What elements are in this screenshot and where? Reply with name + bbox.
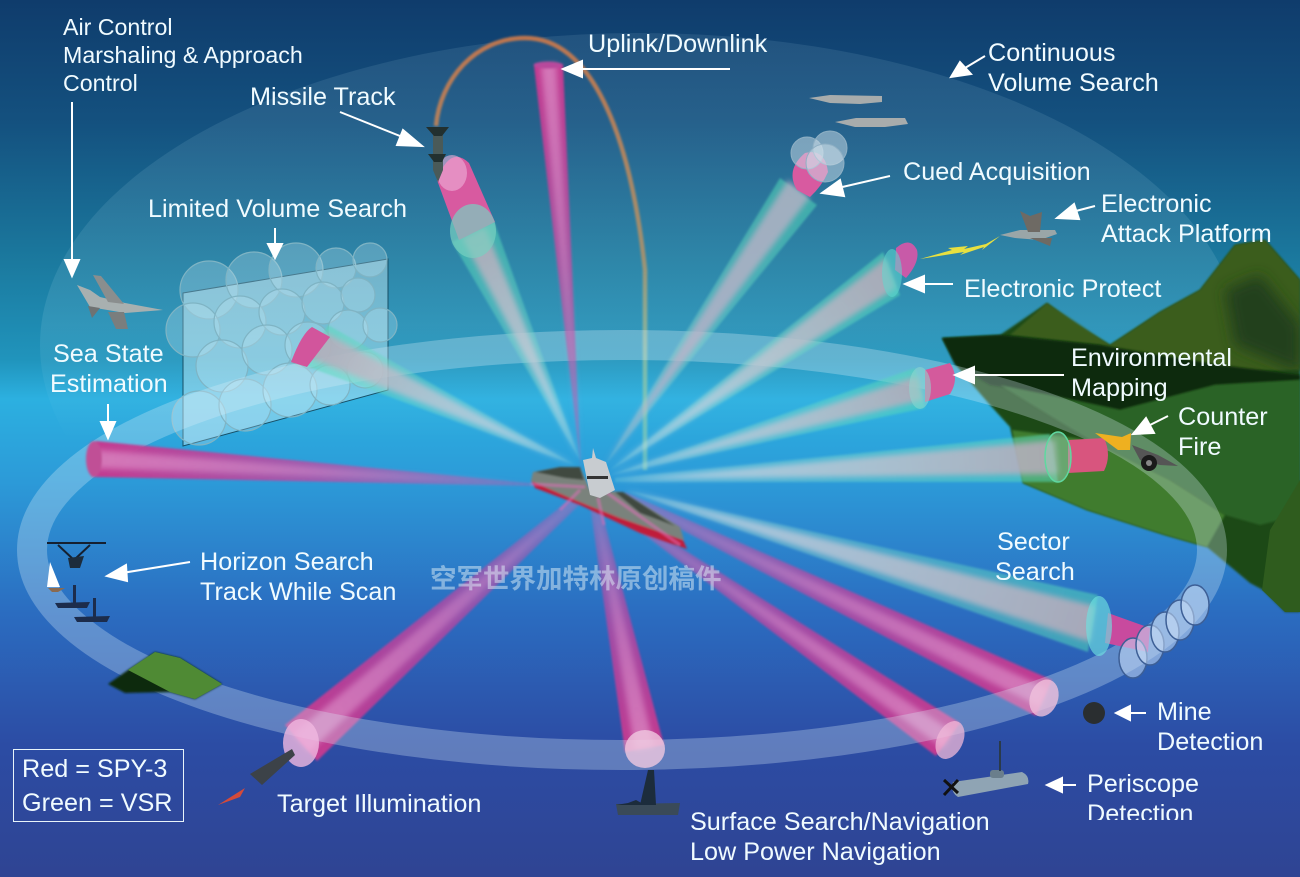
label: electronic attack platform	[1101, 190, 1272, 248]
beam: target illumination	[285, 497, 581, 761]
electronic attack jet	[1000, 211, 1057, 246]
arrow: mine	[1116, 706, 1146, 720]
coverage dome	[40, 33, 1240, 657]
beam: south surface	[590, 505, 664, 752]
label: sea state estimation: Estimation	[50, 370, 168, 398]
label: continuous volume search: Continuous	[988, 39, 1115, 67]
label: electronic attack platform: Electronic	[1101, 190, 1212, 218]
beam: missile track	[437, 155, 580, 460]
beam: environmental mapping	[610, 363, 955, 475]
label: air control: Control	[63, 70, 138, 96]
mine	[1083, 702, 1105, 724]
label: periscope detection	[1089, 774, 1198, 820]
arrow: missile track	[340, 112, 422, 146]
beam: counter fire	[615, 432, 1108, 482]
label: mine detection	[1157, 698, 1263, 756]
beam: east surface	[625, 492, 1052, 716]
label: surface search: Surface Search/Navigation	[690, 808, 990, 836]
label: uplink/downlink: Uplink/Downlink	[588, 30, 768, 58]
label: sector search: Sector	[997, 528, 1070, 556]
label: sea state estimation	[50, 340, 168, 398]
label: air control: Air Control	[63, 14, 173, 40]
arrow: cued	[822, 176, 890, 196]
arrow: air control	[65, 102, 79, 276]
arrow: protect	[905, 276, 953, 292]
label: horizon search	[200, 548, 396, 606]
label: air control	[63, 14, 303, 96]
ship hull	[530, 467, 687, 549]
label: periscope detection: Periscope	[1087, 770, 1199, 798]
arrow: uplink	[563, 61, 730, 77]
label: counter fire: Fire	[1178, 433, 1221, 461]
label: sector search	[995, 528, 1075, 586]
beam: south-east surface	[600, 497, 960, 756]
beam end: target illumination	[283, 719, 319, 767]
jamming bolt	[920, 236, 1000, 259]
fighter jet	[77, 275, 163, 329]
legend box: Green = VSR	[22, 789, 172, 817]
label: continuous volume search	[988, 39, 1159, 97]
beam end: south-east surface	[930, 716, 970, 764]
sector search spots	[1119, 585, 1209, 678]
label: missile track: Missile Track	[250, 83, 396, 111]
label: periscope detection: Detection	[1087, 800, 1193, 828]
label: counter fire	[1178, 403, 1268, 461]
arrow: periscope	[1047, 778, 1076, 792]
arrow: electronic attack	[1057, 204, 1095, 219]
small island	[108, 652, 222, 699]
label: environmental mapping: Environmental	[1071, 344, 1232, 372]
cued acquisition spots	[791, 131, 847, 197]
label: environmental mapping	[1071, 344, 1232, 402]
surveillance ring	[32, 345, 1212, 755]
beam: cued acquisition	[605, 178, 817, 465]
beam end: south surface	[625, 730, 665, 768]
uplink arc	[436, 38, 645, 470]
arrow: counter fire	[1133, 416, 1168, 434]
limited volume search panel	[166, 243, 397, 446]
aircraft pair	[809, 95, 908, 127]
arrow: sea state	[101, 404, 115, 438]
label: air control: Marshaling & Approach	[63, 42, 303, 68]
ship superstructure	[583, 448, 615, 498]
label: horizon search: Horizon Search	[200, 548, 374, 576]
submarine	[944, 741, 1028, 797]
label: electronic protect: Electronic Protect	[964, 275, 1161, 303]
counter fire flash	[1095, 433, 1131, 450]
label: mine detection: Detection	[1157, 728, 1263, 756]
target missile	[218, 749, 295, 805]
label: limited volume search: Limited Volume Search	[148, 195, 407, 223]
legend box	[14, 750, 184, 822]
label: cued acquisition: Cued Acquisition	[903, 158, 1091, 186]
legend box: Red = SPY-3	[22, 755, 167, 783]
missile at uplink	[426, 127, 449, 182]
label: counter fire: Counter	[1178, 403, 1268, 431]
label: target illumination: Target Illumination	[277, 790, 481, 818]
island mountains	[942, 240, 1300, 612]
arrow: horizon	[107, 562, 190, 581]
label: sector search: Search	[995, 558, 1075, 586]
arrow: limited	[268, 228, 282, 258]
beam: electronic protect	[610, 242, 918, 470]
small surface ship	[616, 770, 680, 815]
label: sea state estimation: Sea State	[53, 340, 164, 368]
label: environmental mapping: Mapping	[1071, 374, 1168, 402]
label: mine detection: Mine	[1157, 698, 1212, 726]
label: surface search	[690, 808, 990, 866]
arrow: environmental	[955, 367, 1064, 383]
arrow: continuous	[951, 56, 985, 77]
label: surface search: Low Power Navigation	[690, 838, 941, 866]
label: horizon search: Track While Scan	[200, 578, 396, 606]
beam: uplink	[534, 62, 581, 470]
beam: limited volume search	[291, 325, 575, 465]
beam: sea state	[86, 441, 530, 486]
artillery gun	[1132, 445, 1178, 471]
beam: sector search	[625, 490, 1150, 656]
beam end: east surface	[1024, 675, 1064, 721]
watermark: 空军世界加特林原创稿件	[430, 564, 722, 594]
label: continuous volume search: Volume Search	[988, 69, 1159, 97]
horizon targets	[47, 543, 110, 622]
label: electronic attack platform: Attack Platform	[1101, 220, 1272, 248]
